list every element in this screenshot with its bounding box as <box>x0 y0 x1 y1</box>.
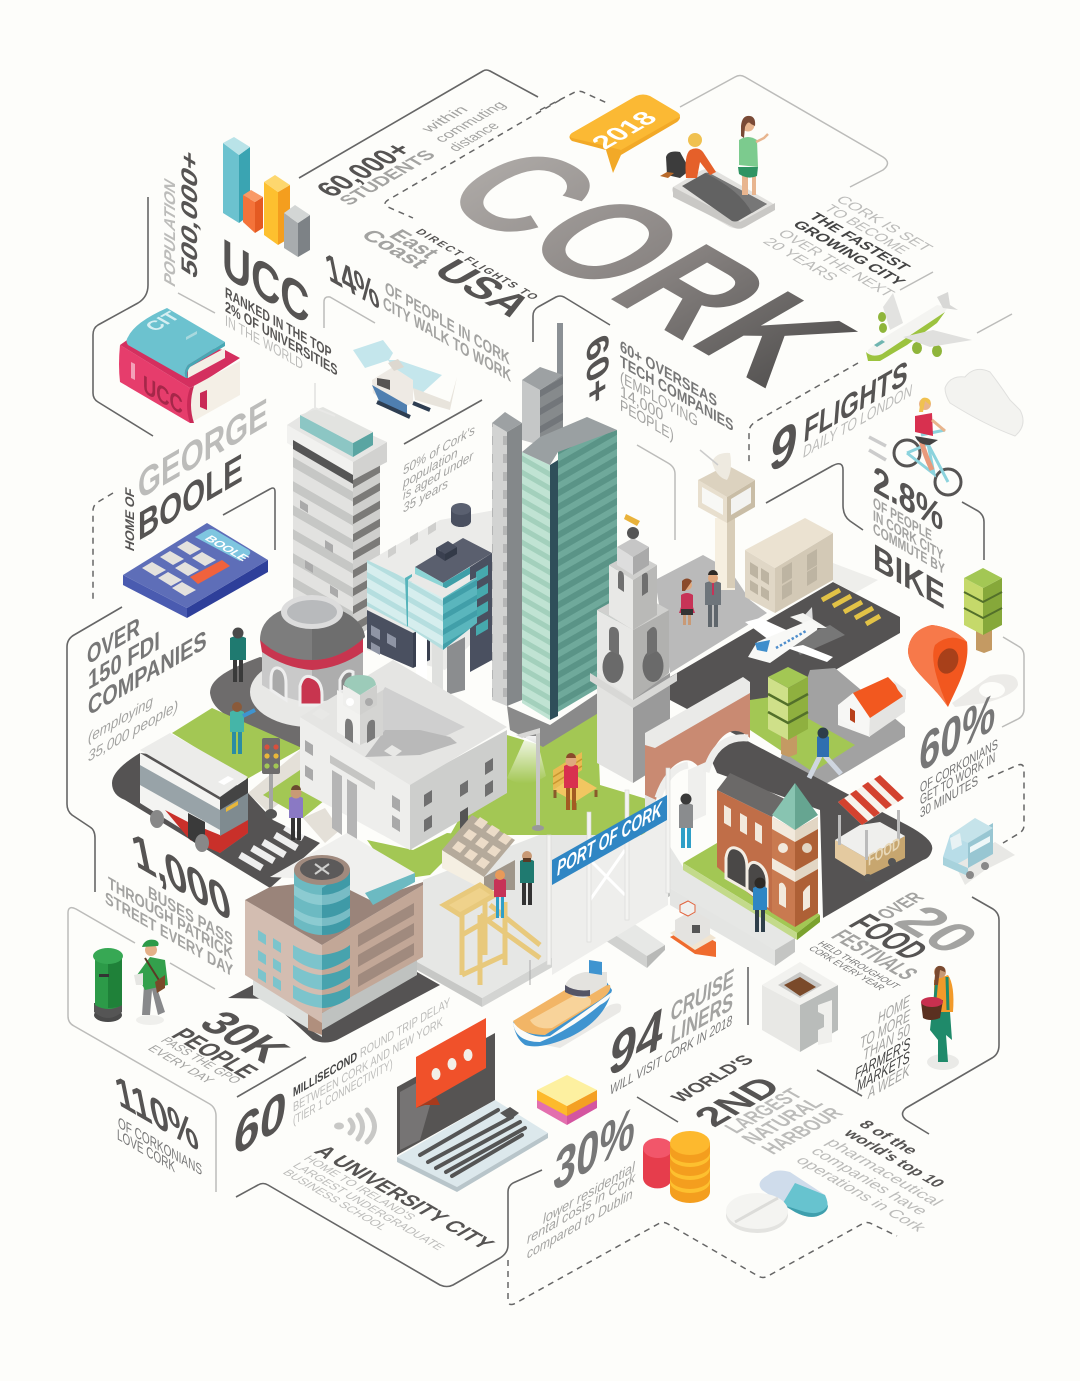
text: nine flights <box>766 353 912 487</box>
ground: lawns and roads <box>112 555 932 1042</box>
text: world's 2nd harbour: HARBOUR <box>756 1104 848 1158</box>
person: pointing man <box>230 702 255 754</box>
text: 94 cruise liners: LINERS <box>669 985 735 1051</box>
text: population: 500,000+ <box>176 144 202 283</box>
text: 60 millisecond: 60 <box>231 1076 290 1169</box>
text: fastest growing city <box>759 193 936 300</box>
person: dome visitor <box>230 628 246 682</box>
people in city <box>230 570 841 932</box>
icon: postman <box>134 940 168 1025</box>
text: over 20 food festivals: FOOD <box>840 908 938 965</box>
text: fastest growing city: OVER THE NEXT <box>774 227 898 300</box>
text: population age: is aged under <box>403 447 474 503</box>
person: man in suit <box>705 570 721 627</box>
text: students: 60,000+ <box>309 138 419 202</box>
text: bike commuters: COMMUTE BY <box>873 520 945 579</box>
building: domed hall <box>250 595 370 727</box>
person: woman by gate <box>494 870 506 918</box>
text: 30 percent rental: rental costs in Cork <box>527 1168 636 1247</box>
text: over 20 food festivals: FESTIVALS <box>825 926 924 984</box>
text: over 20 food festivals: OVER <box>872 889 930 923</box>
text: 1,000 buses: STREET EVERY DAY <box>105 888 234 981</box>
crane <box>444 885 540 985</box>
text: George Boole: GEORGE <box>138 390 268 509</box>
text: fastest growing city: CORK IS SET <box>832 193 936 254</box>
text: direct flights to USA: DIRECT FLIGHTS TO <box>412 227 541 302</box>
text: 1,000 buses: BUSES PASS <box>148 882 233 950</box>
text: population age: population <box>402 444 458 492</box>
text: bike commuters <box>873 458 945 618</box>
text: world's 2nd harbour: NATURAL <box>736 1094 828 1148</box>
text: 14 percent walk: CITY WALK TO WORK <box>383 293 512 386</box>
text: bike commuters: 2.8% <box>873 458 943 541</box>
city illustration <box>112 323 932 1048</box>
building: white civic hall <box>300 660 507 850</box>
text: 60 percent commute: OF CORKONIANS <box>920 735 998 796</box>
text: 150 FDI companies: (employing <box>88 692 154 747</box>
bar chart icon <box>223 137 310 257</box>
text: 30 percent rental: lower residential <box>543 1158 636 1227</box>
text: 94 cruise liners <box>605 962 736 1098</box>
person: bearded man <box>520 851 534 905</box>
brick arch <box>645 677 750 830</box>
food stand: FOOD <box>868 834 900 870</box>
tree centre <box>768 667 808 757</box>
text: 30 percent rental: 30% <box>551 1093 639 1205</box>
text: world's 2nd harbour <box>667 1052 848 1158</box>
text: UCC ranking: RANKED IN THE TOP <box>225 284 332 363</box>
text: 1,000 buses: THROUGH PATRICK <box>108 873 233 964</box>
text: 150 FDI companies: COMPANIES <box>88 623 207 722</box>
text: a university city: LARGEST UNDERGRADUATE <box>289 1160 448 1252</box>
text: UCC ranking: UCC <box>222 227 309 338</box>
icon: aeroplane <box>866 292 972 361</box>
text: overseas tech companies <box>580 326 734 445</box>
icon: van <box>943 818 1015 885</box>
text: bike commuters: OF PEOPLE <box>873 494 932 545</box>
text: direct flights to USA <box>356 226 544 323</box>
text: direct flights to USA: East <box>384 226 446 262</box>
text: fastest growing city: 20 YEARS <box>759 235 842 284</box>
text: George Boole: HOME OF <box>123 486 137 553</box>
text: population age: 35 years <box>403 475 448 516</box>
person: blue jacket <box>753 878 767 932</box>
text: overseas tech companies: 14,000 <box>620 383 663 425</box>
text: pharmaceutical companies: companies have <box>807 1145 931 1218</box>
text: farmers markets: MARKETS <box>857 1048 910 1096</box>
text: 60 millisecond <box>231 994 450 1169</box>
text: 150 FDI companies: 35,000 people) <box>88 697 178 766</box>
text: 60 percent commute: 30 MINUTES <box>920 771 978 821</box>
text: population: POPULATION <box>161 175 178 290</box>
icon: calculator: BOOLE <box>201 533 252 563</box>
text: students: commuting <box>431 99 510 145</box>
workshop with solar panels <box>442 815 515 890</box>
text: pharmaceutical companies: world's top 10 <box>839 1127 948 1190</box>
illustration: people on smartphone <box>660 116 775 229</box>
text: overseas tech companies: PEOPLE) <box>620 397 674 445</box>
text: 30 percent rental <box>527 1093 639 1262</box>
text: 14 percent walk: 14% <box>321 243 383 319</box>
street lamp <box>507 728 546 831</box>
vehicle: bus <box>140 733 248 853</box>
text: fastest growing city: TO BECOME <box>820 202 913 257</box>
text: over 20 food festivals: CORK EVERY YEAR <box>805 945 887 992</box>
building: tan block <box>245 833 423 1037</box>
text: 150 FDI companies: 150 FDI <box>88 624 160 696</box>
text: 150 FDI companies <box>87 610 207 766</box>
text: 110 percent: OF CORKONIANS <box>118 1114 202 1180</box>
text: over 20 food festivals <box>805 889 992 992</box>
text: overseas tech companies: 60+ <box>580 326 616 412</box>
cruise ship <box>513 960 621 1048</box>
icon: cloud <box>945 369 1023 436</box>
text: 94 cruise liners: 94 <box>605 992 669 1091</box>
text: pharmaceutical companies: operations in Cork <box>792 1154 930 1235</box>
text: world's 2nd harbour: 2ND <box>685 1071 791 1133</box>
icon: wifi signal <box>334 1110 374 1142</box>
text: over 20 food festivals: 20 <box>881 897 992 962</box>
icon: books: UCC <box>143 370 183 421</box>
text: 30K people: PEOPLE <box>165 1024 265 1082</box>
icon: helicopter <box>353 340 457 417</box>
text: 150 FDI companies: OVER <box>87 610 140 671</box>
icon: post box <box>93 948 123 1022</box>
traffic light <box>262 738 280 819</box>
platform: port quay <box>417 800 795 1007</box>
text: George Boole <box>123 390 268 553</box>
food stand <box>835 775 905 882</box>
icon: location pin <box>908 625 1018 707</box>
person: runner <box>809 728 841 778</box>
brick building <box>717 773 818 927</box>
text: over 20 food festivals: HELD THROUGHOUT <box>814 940 902 991</box>
control tower <box>698 450 755 590</box>
text: world's 2nd harbour: WORLD'S <box>667 1052 759 1106</box>
text: population <box>161 144 202 290</box>
text: nine flights: 9 <box>766 407 801 487</box>
text: farmers markets <box>855 992 911 1103</box>
text: UCC ranking: 2% OF UNIVERSITIES <box>225 298 338 380</box>
text: farmers markets: A WEEK <box>867 1061 910 1103</box>
text: 30K people: EVERY DAY <box>144 1043 218 1086</box>
text: 60 millisecond: BETWEEN CORK AND NEW YORK <box>293 1013 443 1115</box>
text: farmers markets: HOME <box>878 992 910 1028</box>
tug boat <box>670 901 716 957</box>
text: 1,000 buses: 1,000 <box>127 821 236 934</box>
text: 60 millisecond: (TIER 1 CONNECTIVITY) <box>293 1055 393 1128</box>
text: 30K people <box>144 1004 301 1086</box>
text: world's 2nd harbour: LARGEST <box>719 1085 808 1137</box>
text: George Boole: BOOLE <box>138 445 243 550</box>
text: 110 percent: 110% <box>111 1064 202 1162</box>
port of Cork gate <box>547 768 670 975</box>
text: 1,000 buses <box>105 821 236 981</box>
icon: laptop with speech bubble <box>397 1018 548 1192</box>
text: students <box>309 99 510 209</box>
text: students: within <box>417 103 472 136</box>
text: 30 percent rental: compared to Dublin <box>527 1185 633 1262</box>
text: direct flights to USA: Coast <box>356 226 435 272</box>
badge: 2018 speech bubble <box>570 94 680 173</box>
text: 30K people: PASS THE GPO <box>157 1035 245 1086</box>
text: overseas tech companies: TECH COMPANIES <box>620 353 734 436</box>
text: population age: 50% of Cork's <box>403 421 475 478</box>
text: 60 millisecond: MILLISECOND <box>293 1048 357 1100</box>
text: farmers markets: THAN 50 <box>863 1021 910 1065</box>
icon: calculator <box>123 523 268 618</box>
icon: books <box>119 308 240 423</box>
text: students: STUDENTS <box>335 147 441 209</box>
building: striped tower <box>287 383 387 640</box>
text: farmers markets: FARMER'S <box>855 1035 911 1084</box>
icon: pills <box>726 1171 828 1233</box>
icon: stacked coins <box>643 1131 710 1203</box>
icon: planter box <box>762 962 838 1052</box>
text: bike commuters: BIKE <box>873 535 945 618</box>
person: woman on plaza <box>679 578 695 625</box>
person: purple jumper <box>289 785 303 840</box>
text: direct flights to USA: USA <box>423 253 544 323</box>
text: 60 millisecond: ROUND TRIP DELAY <box>360 994 450 1061</box>
text: 110 percent: LOVE CORK <box>117 1126 175 1177</box>
icon: books: CIT <box>141 309 186 335</box>
house <box>838 677 906 737</box>
text: overseas tech companies: 60+ OVERSEAS <box>620 338 717 411</box>
text: overseas tech companies: (EMPLOYING <box>620 369 698 431</box>
icon: sticky notes <box>537 1075 597 1125</box>
building: teal offices <box>367 503 495 695</box>
text: pharmaceutical companies <box>792 1118 948 1235</box>
text: 94 cruise liners: WILL VISIT CORK IN 2018 <box>610 1011 732 1098</box>
church tower <box>590 514 677 783</box>
title: CORK: CORK <box>405 124 892 406</box>
icon: farmer woman with basket <box>921 966 959 1070</box>
text: bike commuters: IN CORK CITY <box>873 507 943 565</box>
text: 60 percent commute: GET TO WORK IN <box>920 748 995 808</box>
text: 94 cruise liners: CRUISE <box>669 962 736 1028</box>
text: pharmaceutical companies: 8 of the <box>855 1118 921 1157</box>
text: UCC ranking <box>222 227 338 380</box>
text: pharmaceutical companies: pharmaceutical <box>822 1136 946 1209</box>
text: 60 percent commute <box>917 681 998 821</box>
text: fastest growing city: THE FASTEST <box>805 210 914 274</box>
text: a university city: HOME TO IRELAND'S <box>300 1153 419 1222</box>
text: students: distance <box>445 120 504 154</box>
small aeroplane <box>745 607 845 663</box>
text: nine flights: DAILY TO LONDON <box>803 382 912 462</box>
person: man on bench <box>564 753 578 810</box>
outline frames <box>67 70 1024 1304</box>
text: fastest growing city: GROWING CITY <box>789 218 909 288</box>
badge: 2018 speech bubble: 2018 <box>584 107 664 153</box>
text: farmers markets: TO MORE <box>860 1007 910 1053</box>
person: grey top <box>679 794 693 848</box>
text: a university city: A UNIVERSITY CITY <box>309 1142 500 1253</box>
text: 30K people: 30K <box>188 1004 301 1069</box>
text: 60 percent commute: 60% <box>917 681 998 785</box>
building: skyscraper <box>492 323 617 747</box>
text: population age <box>402 421 475 516</box>
text: nine flights: FLIGHTS <box>802 353 909 451</box>
port of Cork gate: PORT OF CORK <box>557 797 663 881</box>
beige building <box>745 518 878 613</box>
text: 14 percent walk: OF PEOPLE IN CORK <box>385 278 510 369</box>
text: 14 percent walk <box>321 243 512 386</box>
bench <box>553 752 597 810</box>
text: a university city: BUSINESS SCHOOL <box>279 1167 391 1232</box>
icon: cyclist <box>869 398 961 495</box>
icon: tree right <box>964 568 1002 653</box>
text: UCC ranking: IN THE WORLD <box>225 312 303 374</box>
